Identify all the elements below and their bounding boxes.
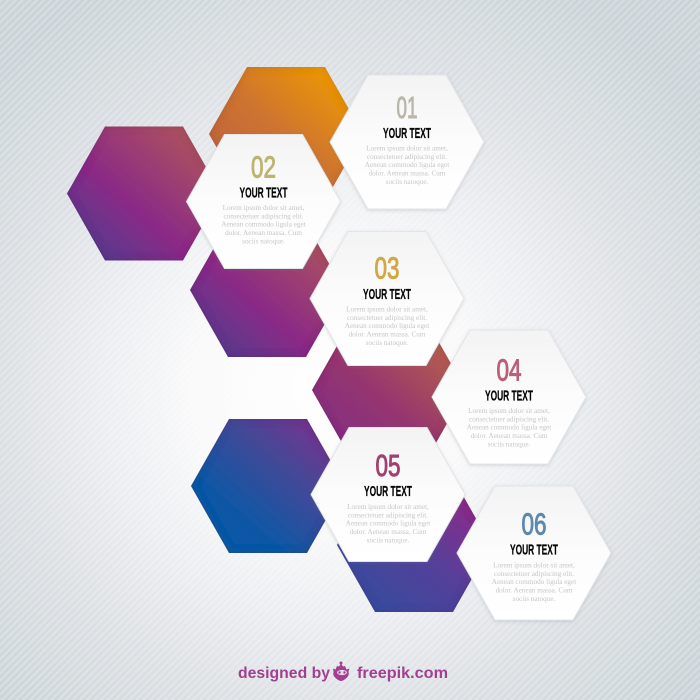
text block 03: Lorem ipsum dolor sit amet, bbox=[346, 306, 428, 314]
hexagon: magenta to rust bbox=[312, 323, 466, 457]
panel: step 04 bbox=[432, 330, 586, 464]
text block 05 bbox=[346, 503, 430, 544]
text block 04: Aenean commodo ligula eget bbox=[467, 424, 551, 432]
heading 01: YOUR TEXT bbox=[383, 126, 431, 142]
text block 02: dolor. Aenean massa. Cum bbox=[225, 229, 302, 237]
hexagon: orange bbox=[209, 67, 363, 201]
text block 03: consectetuer adipiscing elit. bbox=[347, 314, 427, 322]
text block 01: consectetuer adipiscing elit. bbox=[367, 153, 447, 161]
hexagon: purple middle bbox=[190, 223, 344, 357]
text block 05: consectetuer adipiscing elit. bbox=[348, 512, 428, 520]
text block 02 bbox=[221, 204, 306, 246]
number 05: 05 bbox=[376, 448, 400, 483]
number 06: 06 bbox=[522, 506, 546, 542]
panel: step 06 bbox=[457, 486, 611, 620]
text block 04: dolor. Aenean massa. Cum bbox=[471, 432, 548, 440]
credit text right: freepik.com bbox=[357, 665, 448, 682]
credit text left: designed by bbox=[238, 665, 330, 682]
number 03: 03 bbox=[374, 250, 400, 286]
text block 01 bbox=[365, 144, 449, 186]
panel: step 03 bbox=[310, 232, 464, 366]
text block 02: Lorem ipsum dolor sit amet, bbox=[223, 204, 305, 212]
footer credit bbox=[238, 662, 448, 682]
number 01: 01 bbox=[396, 90, 418, 125]
heading 06: YOUR TEXT bbox=[510, 542, 558, 558]
hexagon: indigo bbox=[337, 478, 491, 612]
text block 06: Lorem ipsum dolor sit amet, bbox=[493, 562, 575, 570]
text block 02: Aenean commodo ligula eget bbox=[221, 220, 306, 228]
text block 06: consectetuer adipiscing elit. bbox=[494, 570, 574, 578]
heading 02: YOUR TEXT bbox=[240, 186, 288, 202]
text block 01: sociis natoque. bbox=[386, 178, 429, 186]
text block 04: Lorem ipsum dolor sit amet, bbox=[468, 407, 550, 415]
text block 04: sociis natoque. bbox=[488, 440, 531, 448]
text block 01: Aenean commodo ligula eget bbox=[365, 161, 449, 169]
panel: step 02 bbox=[186, 134, 340, 268]
text block 02: consectetuer adipiscing elit. bbox=[223, 212, 304, 220]
hexagon: purple left bbox=[67, 126, 221, 260]
panel: step 01 bbox=[330, 75, 484, 209]
icon: freepik mascot bbox=[333, 662, 350, 681]
text block 03: dolor. Aenean massa. Cum bbox=[349, 330, 426, 338]
text block 04: consectetuer adipiscing elit. bbox=[469, 416, 549, 424]
text block 03 bbox=[345, 306, 429, 347]
text block 03: Aenean commodo ligula eget bbox=[345, 322, 429, 330]
number 04: 04 bbox=[496, 352, 522, 388]
text block 05: Lorem ipsum dolor sit amet, bbox=[347, 503, 429, 511]
text block 06: dolor. Aenean massa. Cum bbox=[496, 586, 573, 594]
heading 03: YOUR TEXT bbox=[363, 287, 411, 303]
number 02: 02 bbox=[251, 150, 276, 184]
text block 02: sociis natoque. bbox=[242, 238, 285, 246]
text block 05: Aenean commodo ligula eget bbox=[346, 520, 430, 528]
text block 01: dolor. Aenean massa. Cum bbox=[369, 170, 446, 178]
text block 06: Aenean commodo ligula eget bbox=[492, 578, 576, 586]
text block 04 bbox=[467, 407, 551, 448]
text block 05: dolor. Aenean massa. Cum bbox=[350, 528, 427, 536]
heading 05: YOUR TEXT bbox=[364, 484, 412, 500]
text block 03: sociis natoque. bbox=[366, 339, 409, 347]
panel: step 05 bbox=[311, 428, 465, 562]
text block 01: Lorem ipsum dolor sit amet, bbox=[366, 144, 448, 152]
hexagon: blue bbox=[191, 419, 345, 553]
text block 05: sociis natoque. bbox=[367, 536, 410, 544]
text block 06 bbox=[492, 562, 576, 603]
text block 06: sociis natoque. bbox=[513, 595, 556, 603]
heading 04: YOUR TEXT bbox=[485, 388, 533, 404]
